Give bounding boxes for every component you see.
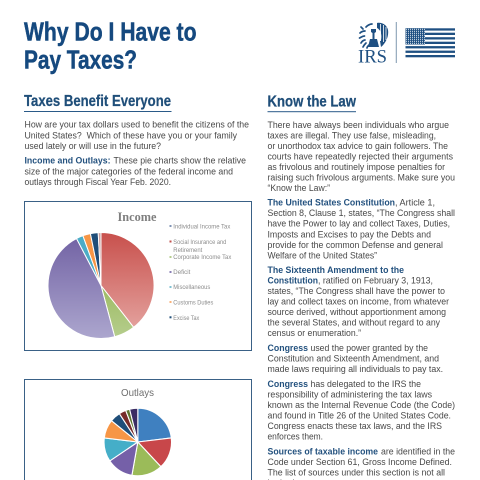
legend: income categories: Retirement bbox=[173, 247, 202, 254]
pie chart: outlays bbox=[104, 408, 172, 476]
text block: know the law intro bbox=[268, 120, 455, 193]
text block: sixteenth amendment: Constitution bbox=[268, 276, 318, 286]
text block: know the law intro: as frivolous and routinely impose penalties for bbox=[268, 162, 445, 172]
legend: income categories: Excise Tax bbox=[173, 315, 200, 322]
text block: sixteenth amendment: The Sixteenth Amendment to the bbox=[268, 265, 404, 275]
chart title: Outlays: Outlays bbox=[121, 387, 154, 399]
text block: sources of taxable income: are identified in the bbox=[381, 446, 455, 456]
text block: constitution: Welfare of the United States” bbox=[268, 250, 377, 260]
text block: intro question bbox=[24, 120, 249, 151]
chart title: Income: Income bbox=[118, 209, 157, 224]
text block: sources of taxable income: Code under Section 61, Gross Income Defined. bbox=[268, 457, 452, 467]
title: Why Do I Have to bbox=[24, 17, 196, 47]
text block: congress delegated: Congress bbox=[268, 379, 308, 389]
text block: congress delegated bbox=[268, 379, 455, 442]
text block: intro question: How are your tax dollars used to benefit the citizens of the bbox=[24, 120, 249, 130]
legend: income categories: Individual Income Tax bbox=[173, 224, 231, 230]
text block: know the law intro: taxes are illegal. They use false, misleading, bbox=[268, 130, 436, 140]
text block: constitution: have the Power to lay and collect Taxes, Duties, bbox=[268, 219, 450, 229]
heading: Taxes Benefit Everyone: Taxes Benefit Everyone bbox=[24, 93, 171, 110]
text block: income and outlays: size of the major categories of the federal income and bbox=[24, 166, 233, 176]
text block: know the law intro: “Know the Law:” bbox=[268, 183, 330, 193]
text block: intro question: used lately or will use in the future? bbox=[24, 141, 161, 151]
text block: constitution: Imposts and Excises to pay the Debts and bbox=[268, 229, 431, 239]
text block: sixteenth amendment: source derived, without apportionment among bbox=[268, 307, 446, 317]
text block: income and outlays bbox=[24, 156, 246, 187]
text block: income and outlays: These pie charts show the relative bbox=[114, 156, 246, 166]
text block: congress delegated: known as the Internal Revenue Code (the Code) bbox=[268, 400, 455, 410]
text block: know the law intro: courts have repeatedly rejected their arguments bbox=[268, 152, 453, 162]
heading: Know the Law: Know the Law bbox=[268, 94, 356, 110]
text block: congress used the power: Constitution and Sixteenth Amendment, and bbox=[268, 354, 439, 364]
text block: sources of taxable income bbox=[268, 446, 455, 480]
text block: constitution: , Article 1, bbox=[395, 198, 435, 208]
text block: congress delegated: responsibility of administering the tax laws bbox=[268, 390, 432, 400]
legend: income categories: Customs Duties bbox=[173, 300, 214, 306]
divider: logo rule bbox=[395, 22, 398, 63]
text block: congress delegated: enforces them. bbox=[268, 432, 323, 442]
text block: congress delegated: Congress enacts these tax laws, and the IRS bbox=[268, 421, 442, 431]
legend: income categories: Social Insurance and bbox=[173, 239, 226, 246]
text block: intro question: United States? Which of these have you or your family bbox=[24, 130, 237, 140]
text block: sixteenth amendment: census or enumeration.” bbox=[268, 328, 361, 338]
title: Pay Taxes? bbox=[24, 44, 137, 74]
text block: constitution: Section 8, Clause 1, states, “The Congress shall bbox=[268, 208, 455, 218]
text block: sixteenth amendment: states, “The Congress shall have the power to bbox=[268, 286, 445, 296]
text block: constitution: provide for the common Defense and general bbox=[268, 240, 443, 250]
text block: congress used the power: Congress bbox=[268, 343, 308, 353]
icon: IRS logo: IRS bbox=[358, 48, 387, 68]
text block: income and outlays: outlays through Fiscal Year Feb. 2020. bbox=[24, 177, 171, 187]
text block: sixteenth amendment: lay and collect taxes on income, from whatever bbox=[268, 297, 449, 307]
text block: sixteenth amendment: , ratified on February 3, 1913, bbox=[318, 276, 433, 286]
text block: sixteenth amendment bbox=[268, 265, 449, 338]
legend: income categories: Miscellaneous bbox=[173, 284, 211, 291]
text block: sixteenth amendment: the several States, and without regard to any bbox=[268, 318, 440, 328]
legend: income categories: Deficit bbox=[173, 269, 190, 276]
pie chart: income bbox=[48, 232, 154, 339]
panel: income chart bbox=[24, 202, 252, 350]
text block: congress delegated: and found in Title 26 of the United States Code. bbox=[268, 410, 451, 420]
title bbox=[24, 17, 196, 74]
text block: congress used the power: used the power granted by the bbox=[310, 343, 428, 353]
legend: income categories: Corporate Income Tax bbox=[173, 254, 232, 261]
text block: congress delegated: has delegated to the IRS the bbox=[310, 379, 421, 389]
text block: congress used the power: made laws requiring all individuals to pay tax. bbox=[268, 364, 443, 374]
text block: sources of taxable income: Sources of taxable income bbox=[268, 446, 378, 456]
text block: know the law intro: There have always been individuals who argue bbox=[268, 120, 449, 130]
text block: sources of taxable income: The list of sources under this section is not all bbox=[268, 468, 445, 478]
text block: congress used the power bbox=[268, 343, 443, 374]
icon: US flag bbox=[406, 28, 455, 57]
panel: outlays chart bbox=[24, 380, 252, 480]
legend: income categories bbox=[170, 224, 232, 322]
text block: income and outlays: Income and Outlays: bbox=[24, 156, 110, 166]
icon: IRS logo bbox=[358, 23, 388, 68]
text block: constitution: The United States Constitution bbox=[268, 198, 395, 208]
text block: know the law intro: raising such frivolous arguments. Make sure you bbox=[268, 172, 455, 182]
text block: constitution bbox=[268, 198, 455, 260]
text block: know the law intro: or unorthodox tax advice to gain followers. The bbox=[268, 141, 448, 151]
